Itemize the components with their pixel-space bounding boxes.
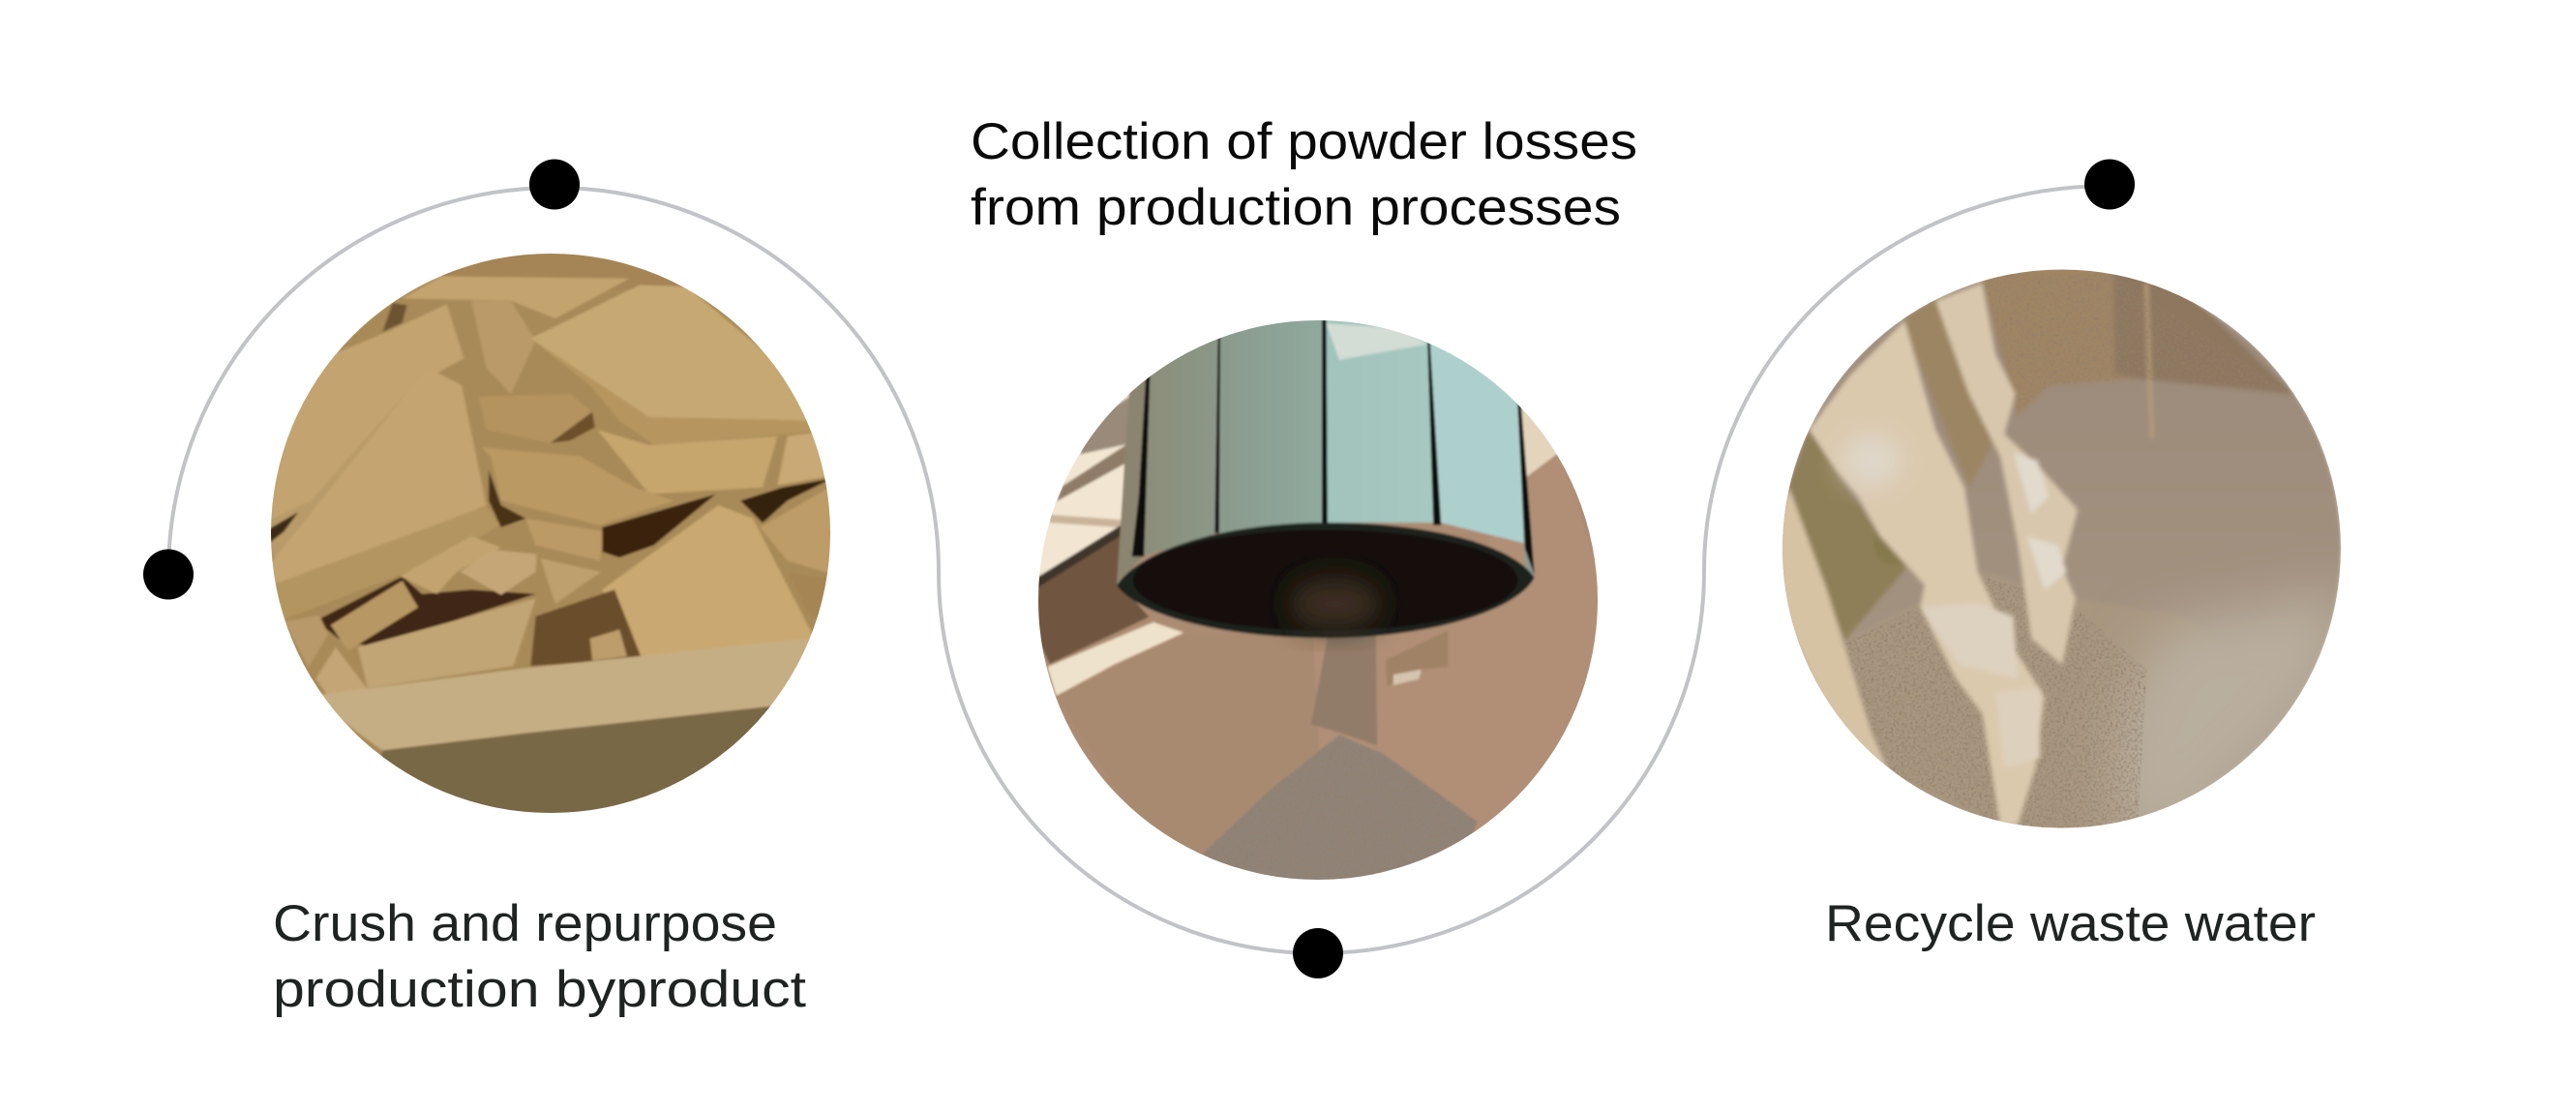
heading: recycle waste water: Recycle waste water (1825, 895, 2316, 952)
heading: crush and repurpose: Crush and repurpose (273, 895, 777, 952)
node dot: powder step (1293, 928, 1343, 978)
photo: crushed ceramic byproduct (264, 252, 832, 816)
photo: waste water recycling (1774, 265, 2351, 838)
node dot: water step (2084, 159, 2135, 209)
heading: collection of powder losses: from production processes (971, 179, 1621, 236)
heading: crush and repurpose: production byproduct (273, 961, 806, 1018)
heading: crush and repurpose (273, 895, 806, 1018)
connecting curve (168, 186, 2110, 953)
photo: powder collection hopper (1036, 297, 1603, 882)
node dot: crush step (529, 159, 580, 209)
node dot: start (143, 550, 194, 600)
heading: collection of powder losses (971, 113, 1637, 236)
heading: collection of powder losses: Collection of powder losses (971, 113, 1637, 170)
